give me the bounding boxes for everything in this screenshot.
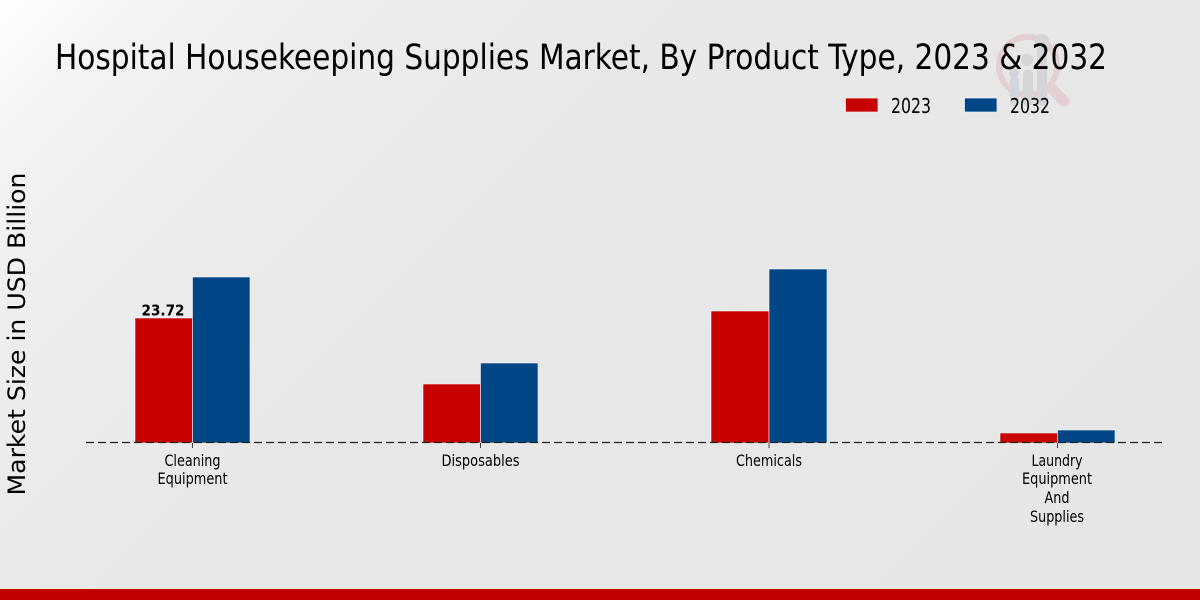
category label: Laundry Equipment And Supplies: Supplies <box>1030 507 1084 526</box>
legend item: 2032 <box>964 94 1050 118</box>
bars: Cleaning Equipment <box>135 277 250 443</box>
x-axis baseline <box>86 442 1164 444</box>
category label: Laundry Equipment And Supplies: And <box>1044 488 1070 507</box>
bars: Chemicals <box>711 269 827 443</box>
category label: Laundry Equipment And Supplies: Laundry <box>1032 451 1083 470</box>
y-axis title: Market Size in USD Billion <box>3 172 31 496</box>
legend item: 2032: 2032 <box>1010 94 1050 118</box>
icon: watermark logo <box>999 34 1064 106</box>
legend item: 2023 <box>846 94 931 118</box>
category label: Disposables: Disposables <box>442 451 520 470</box>
bars: Disposables <box>423 363 538 443</box>
category label: Cleaning Equipment: Equipment <box>158 469 228 488</box>
category label: Cleaning Equipment: Cleaning <box>164 451 220 470</box>
category label: Laundry Equipment And Supplies: Equipment <box>1022 469 1092 488</box>
category label: Cleaning Equipment <box>158 451 228 488</box>
legend item: 2023: 2023 <box>891 94 931 118</box>
category label: Chemicals: Chemicals <box>736 451 802 470</box>
bars: Laundry Equipment And Supplies <box>1000 430 1115 443</box>
data label: 23.72 <box>142 302 184 320</box>
footer bar <box>0 589 1200 600</box>
title: Hospital Housekeeping Supplies Market, By Product Type, 2023 & 2032 <box>55 38 1107 78</box>
category label: Laundry Equipment And Supplies <box>1022 451 1092 526</box>
legend <box>846 94 1050 118</box>
bar chart <box>86 269 1164 448</box>
